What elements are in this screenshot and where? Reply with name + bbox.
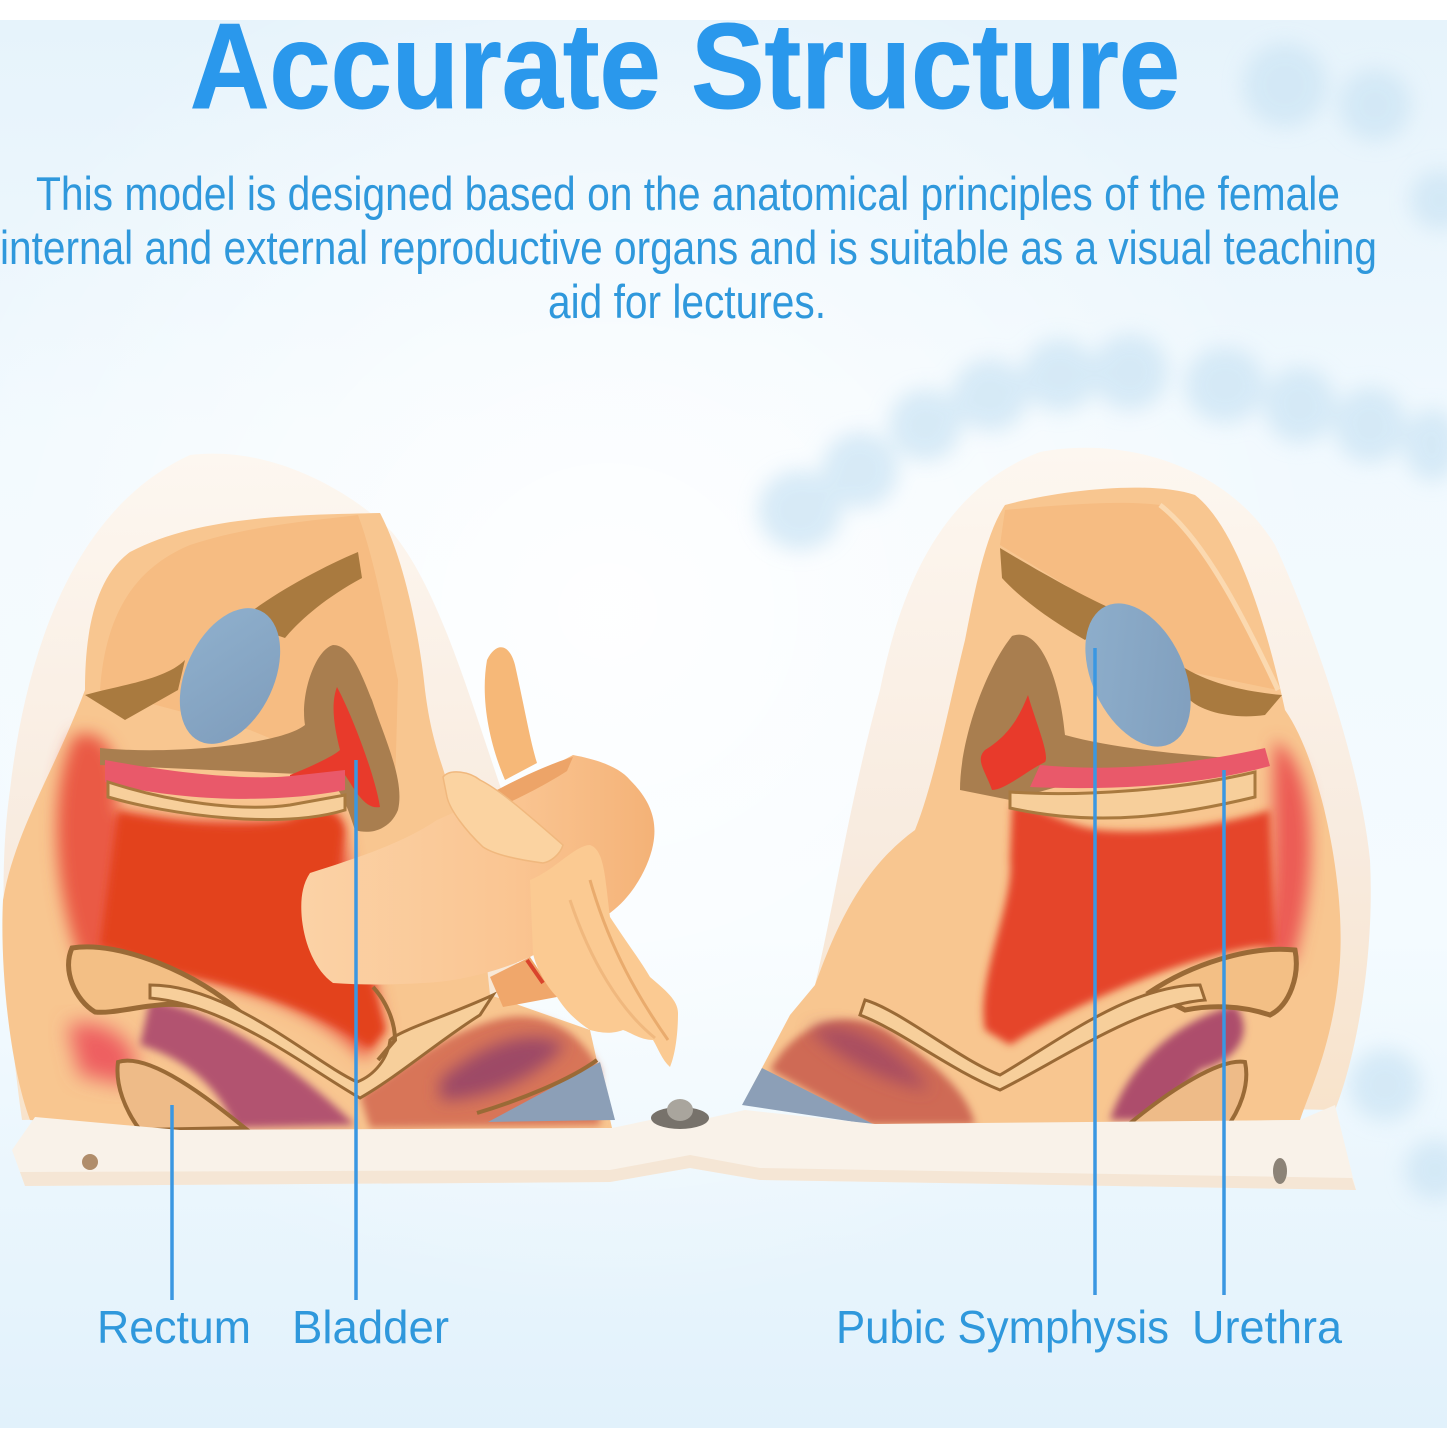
upright flap — [485, 647, 537, 780]
gray perineal wedge — [742, 1068, 875, 1125]
uterus-shaped wall — [100, 645, 399, 832]
label: Pubic Symphysis: Pubic Symphysis — [836, 1301, 1169, 1353]
upper labia — [443, 772, 563, 863]
lower section below tube — [490, 957, 557, 1007]
inner face shading — [100, 515, 398, 790]
bone sections — [1150, 949, 1296, 1015]
red soft tissue — [57, 734, 385, 1060]
label: Rectum: Rectum — [97, 1301, 251, 1353]
description text — [0, 167, 1377, 328]
bone sections — [69, 947, 240, 1012]
description text: aid for lectures. — [548, 275, 826, 328]
red soft tissue — [1262, 740, 1310, 965]
leader lines — [172, 648, 1224, 1300]
upper muscle stripes — [1000, 548, 1115, 640]
model base: left and right plates with hinge — [12, 1099, 1356, 1190]
title: Accurate Structure — [190, 0, 1180, 134]
lower labia — [530, 845, 678, 1067]
gray perineal wedge — [488, 1062, 615, 1122]
label: Bladder: Bladder — [292, 1301, 449, 1353]
vaginal tract stripes — [105, 760, 345, 799]
peach cross-section body — [2, 513, 612, 1132]
right half of the model — [742, 448, 1371, 1130]
translucent outer shell — [800, 448, 1371, 1110]
vaginal tract stripes — [1030, 748, 1270, 788]
left half of the model — [2, 454, 615, 1132]
inner lobe shading — [1000, 503, 1278, 690]
translucent outer shell — [4, 454, 520, 1120]
tube opening — [497, 757, 573, 802]
label: Urethra: Urethra — [1192, 1301, 1342, 1353]
uterus-shaped wall — [960, 635, 1255, 800]
pubic bone oval — [160, 592, 300, 760]
muscle bands at base — [140, 1000, 355, 1128]
pubic bone oval — [1064, 587, 1212, 763]
tube body — [301, 755, 654, 984]
removable external organ piece — [301, 647, 678, 1067]
upper muscle stripes — [238, 552, 362, 638]
peach cross-section body — [745, 488, 1341, 1125]
muscle bands at base — [1110, 1005, 1244, 1120]
